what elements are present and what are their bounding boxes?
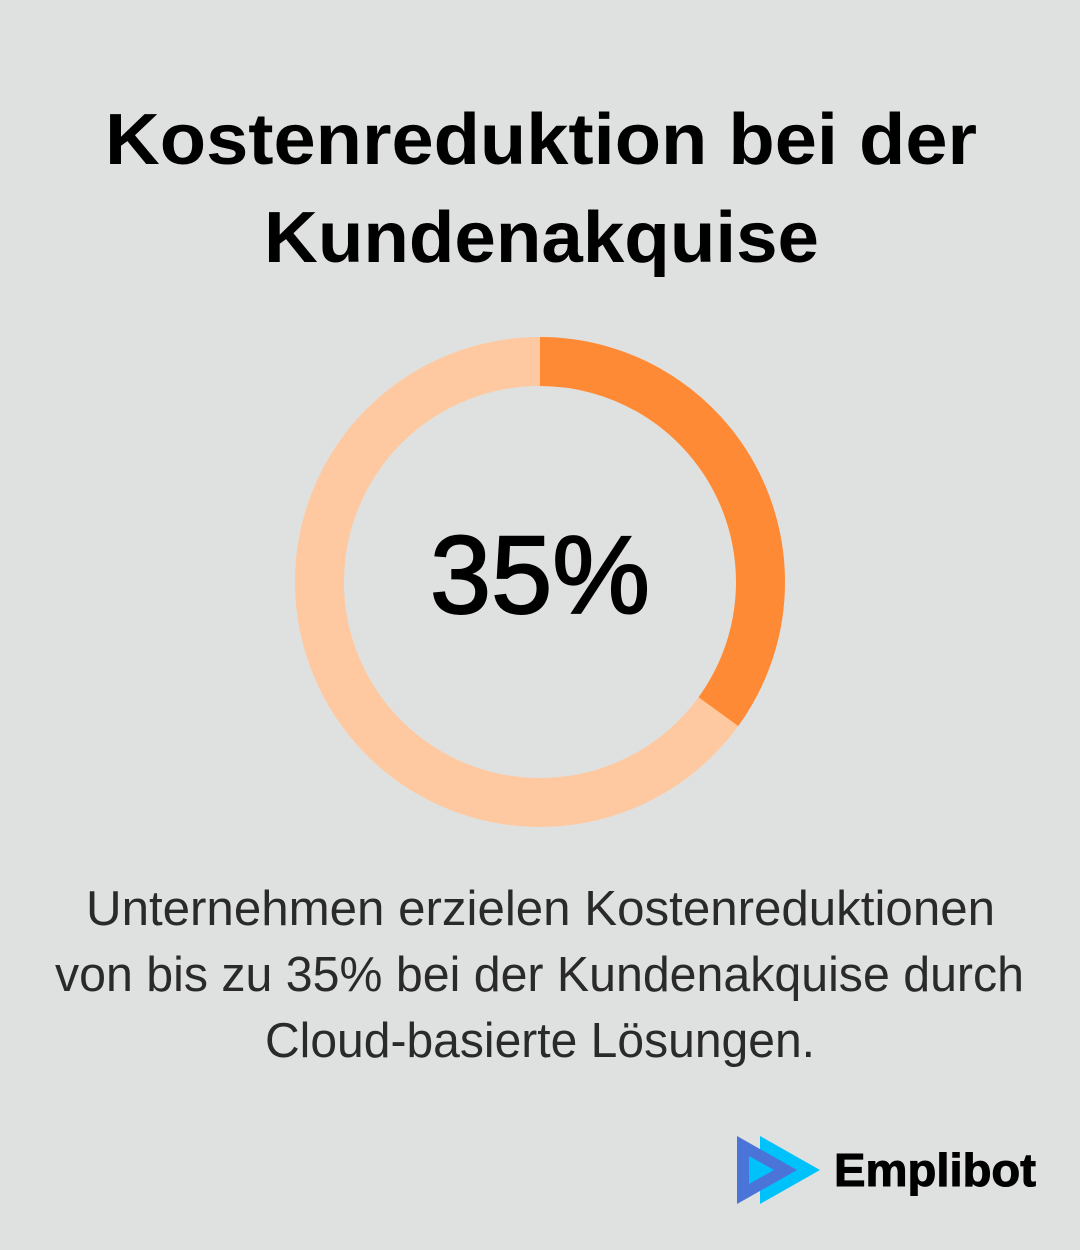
description text xyxy=(55,882,1024,1068)
description text: Cloud-basierte Lösungen. xyxy=(265,1014,815,1068)
icon: play triangles xyxy=(737,1136,820,1204)
description text: Unternehmen erzielen Kostenreduktionen xyxy=(86,882,995,936)
donut value: 35% xyxy=(430,514,650,637)
logo: Emplibot xyxy=(737,1136,1036,1204)
donut chart: 35% xyxy=(320,362,761,802)
description text: von bis zu 35% bei der Kundenakquise durch xyxy=(55,948,1024,1002)
title: Kostenreduktion bei der xyxy=(105,100,977,180)
title: Kundenakquise xyxy=(264,198,819,278)
title xyxy=(105,100,977,278)
logo wordmark: Emplibot xyxy=(834,1144,1036,1196)
